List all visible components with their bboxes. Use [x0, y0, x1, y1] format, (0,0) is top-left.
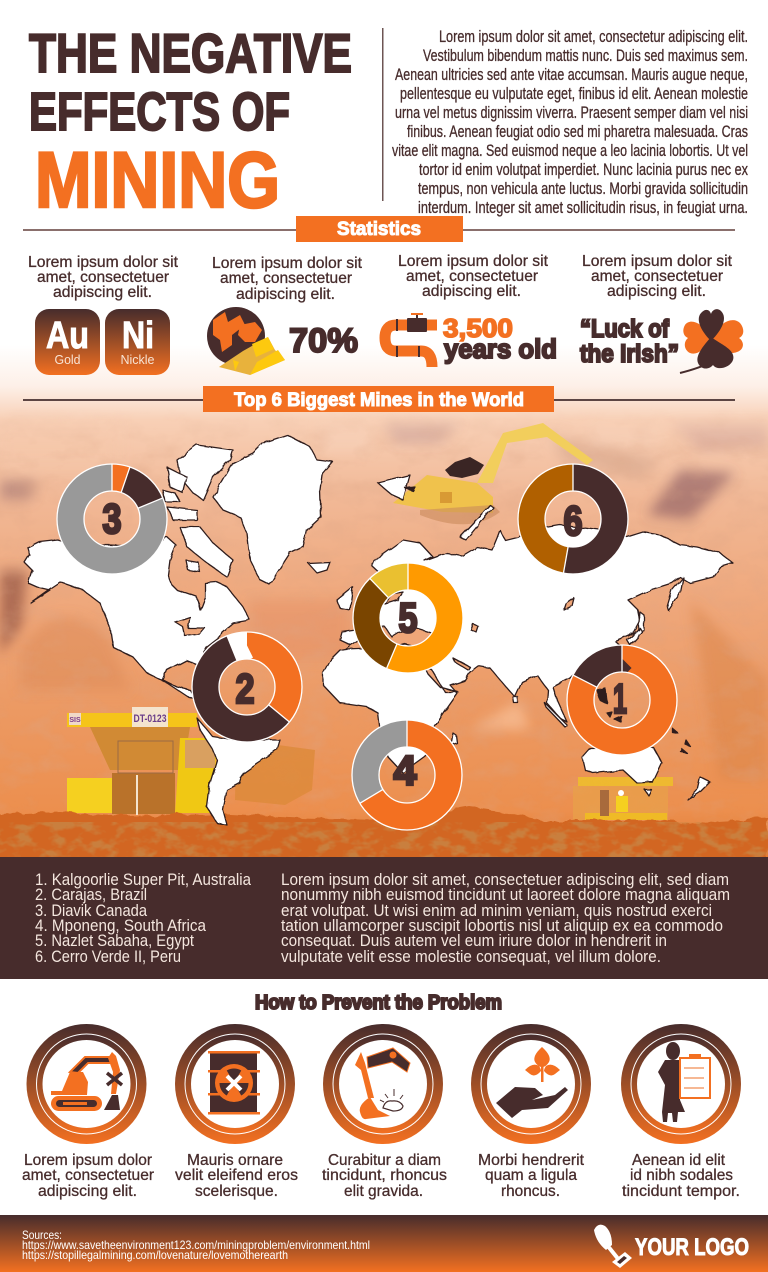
sources [22, 1228, 370, 1262]
title [29, 22, 352, 224]
prevention captions: rhoncus. [501, 1183, 560, 1200]
donut chart 6 [518, 464, 628, 574]
heading bar: top 6 mines: Top 6 Biggest Mines in the World [234, 390, 524, 411]
prevention captions: Morbi hendrerit [478, 1152, 585, 1169]
prevention captions: tincidunt, rhoncus [322, 1167, 447, 1184]
donut chart 2: 2 [236, 665, 254, 712]
donut chart 5: 5 [398, 594, 418, 641]
donut chart 6: 6 [564, 497, 582, 544]
dump truck in photo: DT-0123 [134, 713, 166, 725]
stat 4 text [582, 253, 733, 300]
list of mines: 3. Diavik Canada [35, 902, 148, 920]
stat 3 text [398, 253, 549, 300]
Britain [337, 587, 353, 610]
stat 1 text: amet, consectetuer [37, 269, 170, 286]
description: Lorem ipsum dolor sit amet, consectetuer adipiscing elit, sed diam [281, 871, 729, 889]
prevention captions: tincidunt tempor. [622, 1183, 740, 1200]
excavator in photo [393, 423, 593, 524]
prevention captions: Curabitur a diam [328, 1152, 441, 1169]
Eurasia and Africa [323, 525, 733, 773]
heading bar: top 6 mines [23, 386, 735, 412]
description [281, 871, 730, 966]
stat 1: element tiles: Nickle [120, 352, 154, 367]
Red Sea [425, 668, 458, 692]
stat 1: element tiles: Gold [54, 352, 80, 367]
ground [0, 806, 768, 857]
prevention captions: Aenean id elit [632, 1152, 726, 1169]
stat 4 text: Lorem ipsum dolor sit [582, 253, 733, 270]
icon: pipe [385, 313, 437, 367]
Svalbard [378, 475, 410, 500]
description: vulputate velit esse molestie consequat, vel illum dolore. [281, 948, 661, 966]
prevention captions: Mauris ornare [187, 1152, 283, 1169]
divider [382, 28, 384, 201]
footer [0, 1215, 768, 1272]
list of mines: 2. Carajas, Brazil [35, 886, 147, 904]
stat 1 text: Lorem ipsum dolor sit [28, 254, 179, 271]
stat 3 text: adipiscing elit. [422, 283, 521, 300]
title: MINING [35, 135, 280, 224]
donut chart 5 [353, 563, 463, 673]
list of mines [35, 871, 252, 966]
heading bar: statistics: Statistics [337, 219, 421, 240]
list of mines: 5. Nazlet Sabaha, Egypt [35, 932, 194, 950]
stat 1: element tiles: Ni [122, 315, 154, 357]
value: luck of the irish: the Irish” [580, 340, 679, 368]
Lake Baikal [564, 598, 574, 610]
Iceland [308, 562, 330, 573]
prevention captions: Lorem ipsum dolor [24, 1152, 153, 1169]
stat 2 text: adipiscing elit. [236, 286, 335, 303]
description: tation ullamcorper suscipit lobortis nisl ut aliquip ex ea commodo [281, 917, 723, 935]
description: nonummy nibh euismod tincidunt ut laoreet dolore magna aliquam [281, 886, 730, 904]
logo [594, 1225, 749, 1268]
description: consequat. Duis autem vel eum iriure dolor in hendrerit in [281, 932, 667, 950]
stat 4 text: amet, consectetuer [591, 268, 724, 285]
Sumatra and Java [545, 703, 567, 727]
sources: https://www.savetheenvironment123.com/miningproblem/environment.html [22, 1238, 370, 1252]
dump truck in photo: SIS [69, 717, 81, 724]
heading bar: statistics [23, 216, 735, 242]
Australia [582, 747, 662, 783]
dump truck in photo [67, 707, 315, 815]
Sakhalin [667, 577, 683, 610]
prevention 1: excavator [26, 1024, 146, 1144]
donut chart 3 [57, 464, 167, 574]
prevention captions: adipiscing elit. [38, 1183, 137, 1200]
donut chart 1 [567, 645, 677, 755]
value: 3,500 years old [443, 313, 557, 364]
world map [25, 435, 733, 825]
description: erat volutpat. Ut wisi enim ad minim veniam, quis nostrud exerci [281, 902, 712, 920]
Madagascar [451, 733, 457, 745]
Great Lakes [175, 617, 205, 636]
Arctic islands [177, 445, 233, 500]
stat 2 text: amet, consectetuer [220, 270, 353, 287]
donut chart 1: 1 [613, 675, 627, 722]
prevention captions: id nibh sodales [630, 1167, 733, 1184]
list of mines: 1. Kalgoorlie Super Pit, Australia [35, 871, 252, 889]
stat 2 text [212, 255, 363, 303]
Baltic [385, 592, 403, 604]
stat 3 text: amet, consectetuer [406, 268, 539, 285]
list of mines: 6. Cerro Verde II, Peru [35, 948, 181, 966]
donut chart 4 [352, 720, 462, 830]
stat 4 text: adipiscing elit. [607, 283, 706, 300]
panel: mines list [0, 857, 768, 979]
Caspian [471, 624, 478, 632]
prevention 2: barrel [175, 1024, 295, 1144]
Greenland [213, 435, 333, 585]
value: luck of the irish: “Luck of [580, 315, 670, 343]
stat 1: element tiles: Au [46, 315, 89, 357]
donut chart 4: 4 [394, 747, 417, 794]
prevention captions: velit eleifend eros [175, 1167, 298, 1184]
icon: clover [680, 309, 743, 373]
title: THE NEGATIVE [29, 22, 352, 84]
value: 3,500 years old: 3,500 [443, 313, 513, 343]
intro paragraph [392, 28, 749, 217]
title: EFFECTS OF [29, 82, 290, 142]
Japan [638, 612, 644, 632]
North America [25, 537, 250, 700]
list of mines: 4. Mponeng, South Africa [35, 917, 207, 935]
stat 3 text: Lorem ipsum dolor sit [398, 253, 549, 270]
sources: Sources: [22, 1228, 62, 1242]
stat 1 text: adipiscing elit. [53, 284, 152, 301]
prevention captions: elit gravida. [344, 1183, 423, 1200]
donut chart 2 [192, 632, 302, 742]
small truck and workers in photo [573, 777, 673, 820]
donut chart 3: 3 [102, 495, 122, 542]
Novaya Zemlya [460, 505, 493, 540]
stat 1 text [28, 254, 179, 301]
heading: how to prevent: How to Prevent the Problem [255, 992, 502, 1014]
Tasmania [644, 789, 651, 795]
Sri Lanka [513, 697, 518, 703]
prevention 5: person with clipboard [621, 1024, 741, 1144]
prevention captions: scelerisque. [195, 1183, 278, 1200]
prevention captions: quam a ligula [485, 1167, 577, 1184]
sources: https://stopillegalmining.com/lovenature/lovemotherearth [22, 1248, 288, 1262]
stat 2 text: Lorem ipsum dolor sit [212, 255, 363, 272]
prevention 4: hand with plant [471, 1024, 591, 1144]
prevention 3: digger [323, 1024, 443, 1144]
icon: globe with gold bars [207, 307, 285, 375]
photo background: mining site [0, 345, 768, 857]
Mediterranean [345, 626, 435, 649]
South America [197, 718, 280, 825]
Persian Gulf [453, 658, 470, 670]
New Zealand [688, 777, 710, 800]
stat 1: element tiles [35, 309, 170, 375]
value: luck of the irish [580, 315, 679, 368]
prevention captions: amet, consectetuer [22, 1167, 155, 1184]
value: 3,500 years old: years old [444, 334, 557, 364]
value: 70%: 70% [289, 322, 358, 360]
prevention captions [22, 1152, 740, 1200]
Indonesia islands [597, 688, 608, 704]
